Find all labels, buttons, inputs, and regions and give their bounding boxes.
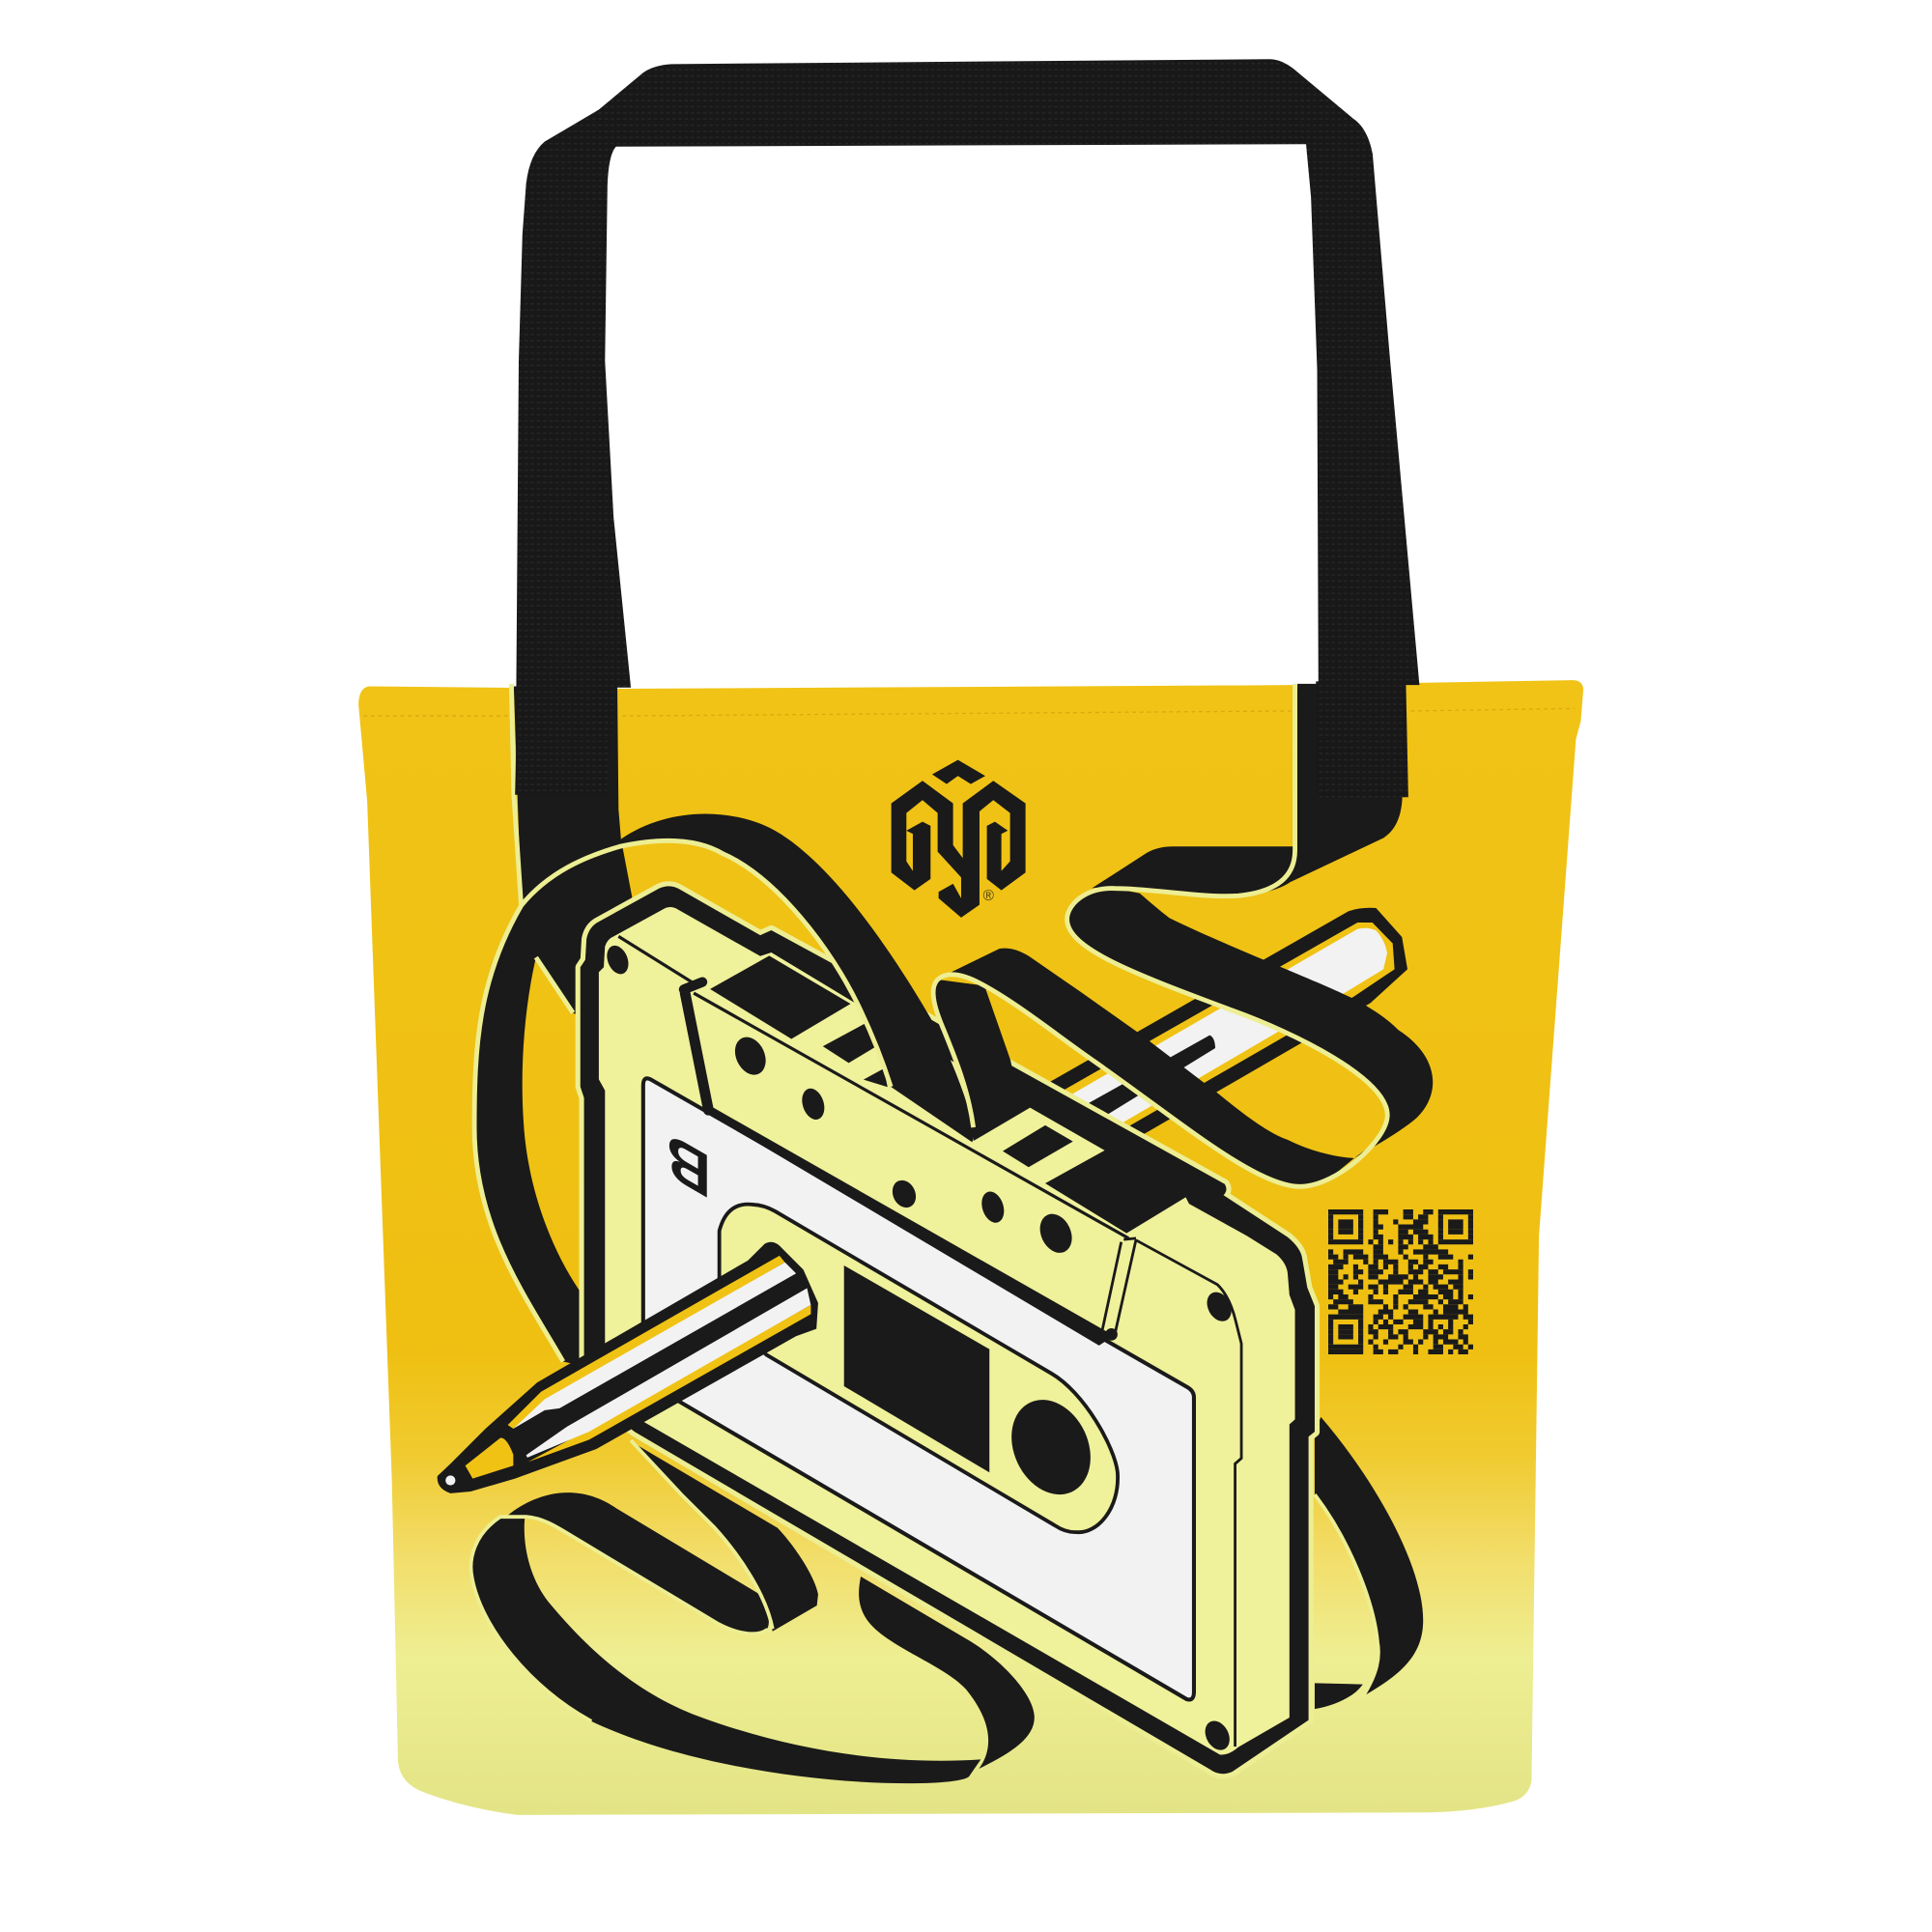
- pencil: front section: [438, 1242, 818, 1493]
- ribbon: fold under cassette: [631, 1440, 818, 1632]
- ribbon: bottom upper fold: [471, 1492, 773, 1721]
- cassette: tape window: [844, 1265, 989, 1472]
- cassette: pale face: [599, 907, 1295, 1754]
- logo letters: [892, 781, 1026, 918]
- cassette: side letter B: B: [667, 1119, 711, 1213]
- seam stitching: [363, 708, 1575, 716]
- cassette: head strip: [618, 936, 1136, 1346]
- cassette: spindle hole: [997, 1387, 1105, 1507]
- ribbon: lower right tape: [1315, 1417, 1423, 1709]
- cassette: spindle pill: [720, 1205, 1118, 1532]
- cassette: outer shell: [581, 886, 1315, 1774]
- ribbon: pale outline of S fold: [933, 684, 1387, 1186]
- handle: top strap: [516, 59, 1419, 688]
- ribbon: S fold middle: [1067, 889, 1433, 1158]
- QR code: [1328, 1212, 1473, 1351]
- pencil: rear section: [1047, 908, 1407, 1137]
- logo roof: [932, 760, 985, 784]
- cassette: corner screws: [603, 943, 1236, 1754]
- ribbon: descending strand: [933, 980, 1030, 1141]
- ribbon: S fold lower band: [952, 949, 1354, 1186]
- panel: bag body: [358, 680, 1583, 1815]
- handle: left strap end: [515, 685, 616, 795]
- ribbon: S fold top: [1092, 684, 1403, 896]
- ribbon: arc over cassette: [620, 814, 975, 1142]
- logo registered mark: ®: [983, 888, 995, 904]
- ribbon: bottom large sweep: [471, 1517, 980, 1783]
- handle: right strap end: [1316, 681, 1408, 799]
- cassette: top face openings: [710, 955, 1187, 1234]
- ribbon: pale outline of left loop: [474, 840, 891, 1361]
- cassette: side face line: [1136, 1240, 1241, 1747]
- cassette: white label: [643, 1078, 1194, 1699]
- ribbon: curl under cassette: [859, 1577, 1035, 1769]
- logo: GYO emblem: [892, 760, 1026, 918]
- ribbon: tape from left handle and left loop: [474, 684, 632, 1368]
